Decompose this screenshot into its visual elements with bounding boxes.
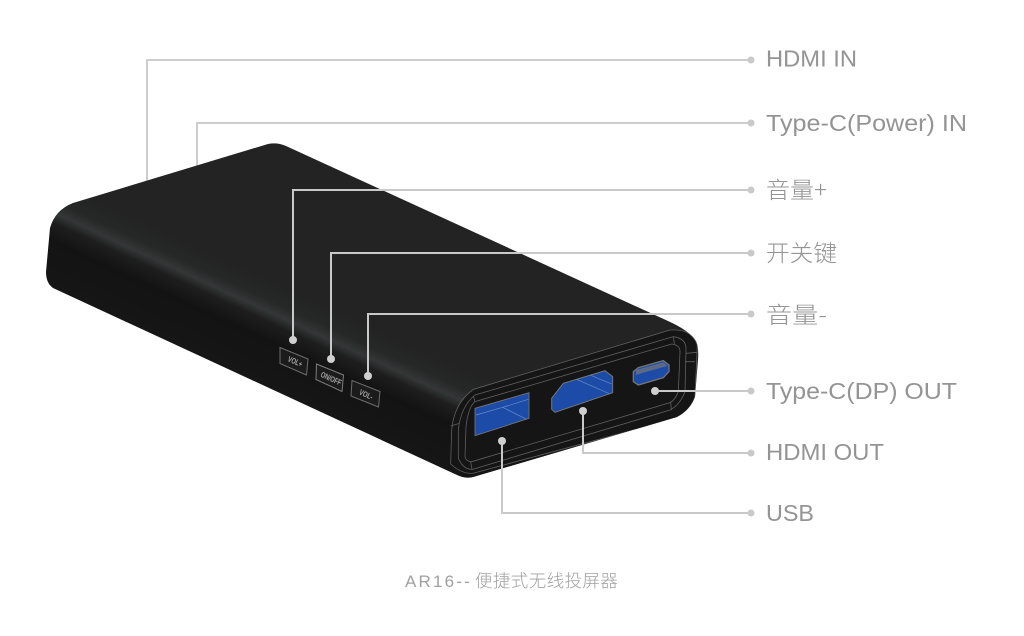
label: HDMI OUT: HDMI OUT [766,439,884,465]
label: USB: USB [766,500,814,526]
button: ON/OFF: ON/OFF [319,370,343,387]
port: USB [475,393,529,436]
label: 开关键: 开关键 [766,234,837,268]
leader: 开关键 [327,250,754,363]
label: HDMI IN: HDMI IN [766,46,857,72]
front panel [451,330,698,479]
leader: Type-C(DP) OUT [651,387,754,395]
button: ON/OFF [316,364,344,392]
leader: HDMI OUT [579,407,754,456]
end dot: HDMI IN [748,56,754,64]
label: Type-C(Power) IN: Type-C(Power) IN [766,110,967,136]
label: 音量-: 音量- [766,296,827,330]
end dot: Type-C Power IN [748,120,754,126]
leader: 音量- [364,310,754,380]
port: Type-C [633,361,669,385]
leader: 音量+ [289,186,754,344]
panel outlines [451,330,697,473]
label: 音量+: 音量+ [766,171,827,205]
button: VOL- [351,380,380,407]
device body [40,130,710,490]
infographic canvas [46,50,965,588]
leader: USB [498,437,754,516]
leader lines behind device: HDMI IN and Type-C Power IN [147,60,751,185]
button: VOL-: VOL- [358,388,374,402]
label: Type-C(DP) OUT: Type-C(DP) OUT [766,378,957,404]
button: VOL+ [280,348,308,375]
caption: 便捷式无线投屏器 [475,571,618,591]
button: VOL+: VOL+ [286,355,304,369]
port: HDMI [552,371,613,412]
caption: AR16-- [405,572,472,591]
